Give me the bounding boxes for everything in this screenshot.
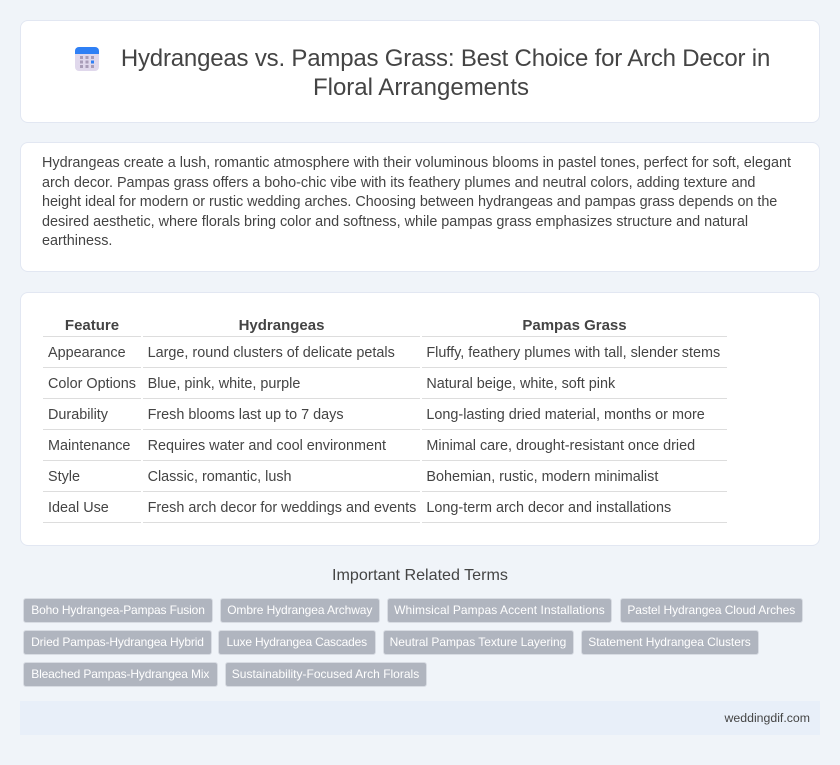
text block: intro: Hydrangeas create a lush, romantic atmosphere with their voluminous blooms in pastel tones, perfect for soft, elegant [42, 155, 791, 171]
tag: Ombre Hydrangea Archway [227, 603, 372, 617]
tag [23, 630, 212, 655]
table header: Feature [43, 315, 141, 337]
row: Style: Classic, romantic, lush [148, 469, 292, 485]
row: Maintenance [43, 438, 727, 461]
row: Ideal Use: Ideal Use [48, 500, 109, 516]
tag [23, 598, 213, 623]
row: Appearance [43, 345, 727, 368]
tag: Dried Pampas-Hydrangea Hybrid [31, 635, 204, 649]
text block: intro: desired aesthetic, where florals bring color and softness, while pampas grass emphasizes structure and natural [42, 214, 748, 230]
row: Appearance: Fluffy, feathery plumes with tall, slender stems [426, 345, 720, 361]
row: Color Options: Blue, pink, white, purple [148, 376, 300, 392]
row: Ideal Use: Fresh arch decor for weddings and events [148, 500, 416, 516]
title: Hydrangeas vs. Pampas Grass: Best Choice for Arch Decor in [121, 45, 770, 72]
row: Style: Bohemian, rustic, modern minimalist [426, 469, 658, 485]
tag: Luxe Hydrangea Cascades [227, 635, 367, 649]
row: Appearance: Large, round clusters of delicate petals [148, 345, 395, 361]
tag: Bleached Pampas-Hydrangea Mix [31, 667, 209, 681]
row: Durability: Fresh blooms last up to 7 days [148, 407, 344, 423]
row: Ideal Use: Long-term arch decor and installations [426, 500, 671, 516]
footer source text: weddingdif.com [725, 711, 810, 725]
tag: Pastel Hydrangea Cloud Arches [627, 603, 795, 617]
row: Maintenance: Minimal care, drought-resistant once dried [426, 438, 695, 454]
row: Color Options: Natural beige, white, soft pink [426, 376, 615, 392]
tag: Whimsical Pampas Accent Installations [394, 603, 605, 617]
tag: Sustainability-Focused Arch Florals [232, 667, 419, 681]
row: Style [43, 469, 727, 492]
tag [224, 662, 426, 687]
table header: Feature: Feature [65, 317, 119, 334]
row: Ideal Use [43, 500, 727, 523]
footer bar [20, 701, 820, 735]
row: Style: Style [48, 469, 80, 485]
tag [23, 662, 218, 687]
row: Appearance: Appearance [48, 345, 126, 361]
panel: intro text [20, 142, 820, 272]
row: Durability: Durability [48, 407, 108, 423]
text block: intro: height ideal for modern or rustic wedding arches. Choosing between hydrangeas and pampas grass depends on the [42, 194, 777, 210]
row: Durability: Long-lasting dried material, months or more [426, 407, 705, 423]
text block: intro: earthiness. [42, 233, 112, 249]
row: Maintenance: Requires water and cool environment [148, 438, 386, 454]
tag [382, 630, 574, 655]
table header: Pampas Grass: Pampas Grass [522, 317, 627, 334]
row: Durability [43, 407, 727, 430]
tag [580, 630, 758, 655]
heading: Important Related Terms: Important Related Terms [332, 566, 508, 584]
title line 2: Floral Arrangements [313, 74, 529, 101]
tag [220, 598, 380, 623]
tag list: related terms [23, 598, 803, 687]
table header: Hydrangeas [143, 315, 420, 337]
text block: intro: arch decor. Pampas grass offers a boho-chic vibe with its feathery plumes and neutral colors, adding texture and [42, 174, 755, 190]
panel: comparison table [20, 292, 820, 546]
panel: title header [20, 20, 820, 123]
tag [387, 598, 612, 623]
icon: calendar [75, 47, 99, 71]
tag: Statement Hydrangea Clusters [588, 635, 751, 649]
tag [620, 598, 802, 623]
table header: Pampas Grass [422, 315, 727, 337]
text block: intro [42, 155, 791, 249]
tag: Neutral Pampas Texture Layering [390, 635, 566, 649]
tag [218, 630, 376, 655]
row: Color Options [43, 376, 727, 399]
tag: Boho Hydrangea-Pampas Fusion [31, 603, 205, 617]
row: Maintenance: Maintenance [48, 438, 130, 454]
row: Color Options: Color Options [48, 376, 136, 392]
table header: Hydrangeas: Hydrangeas [239, 317, 324, 334]
